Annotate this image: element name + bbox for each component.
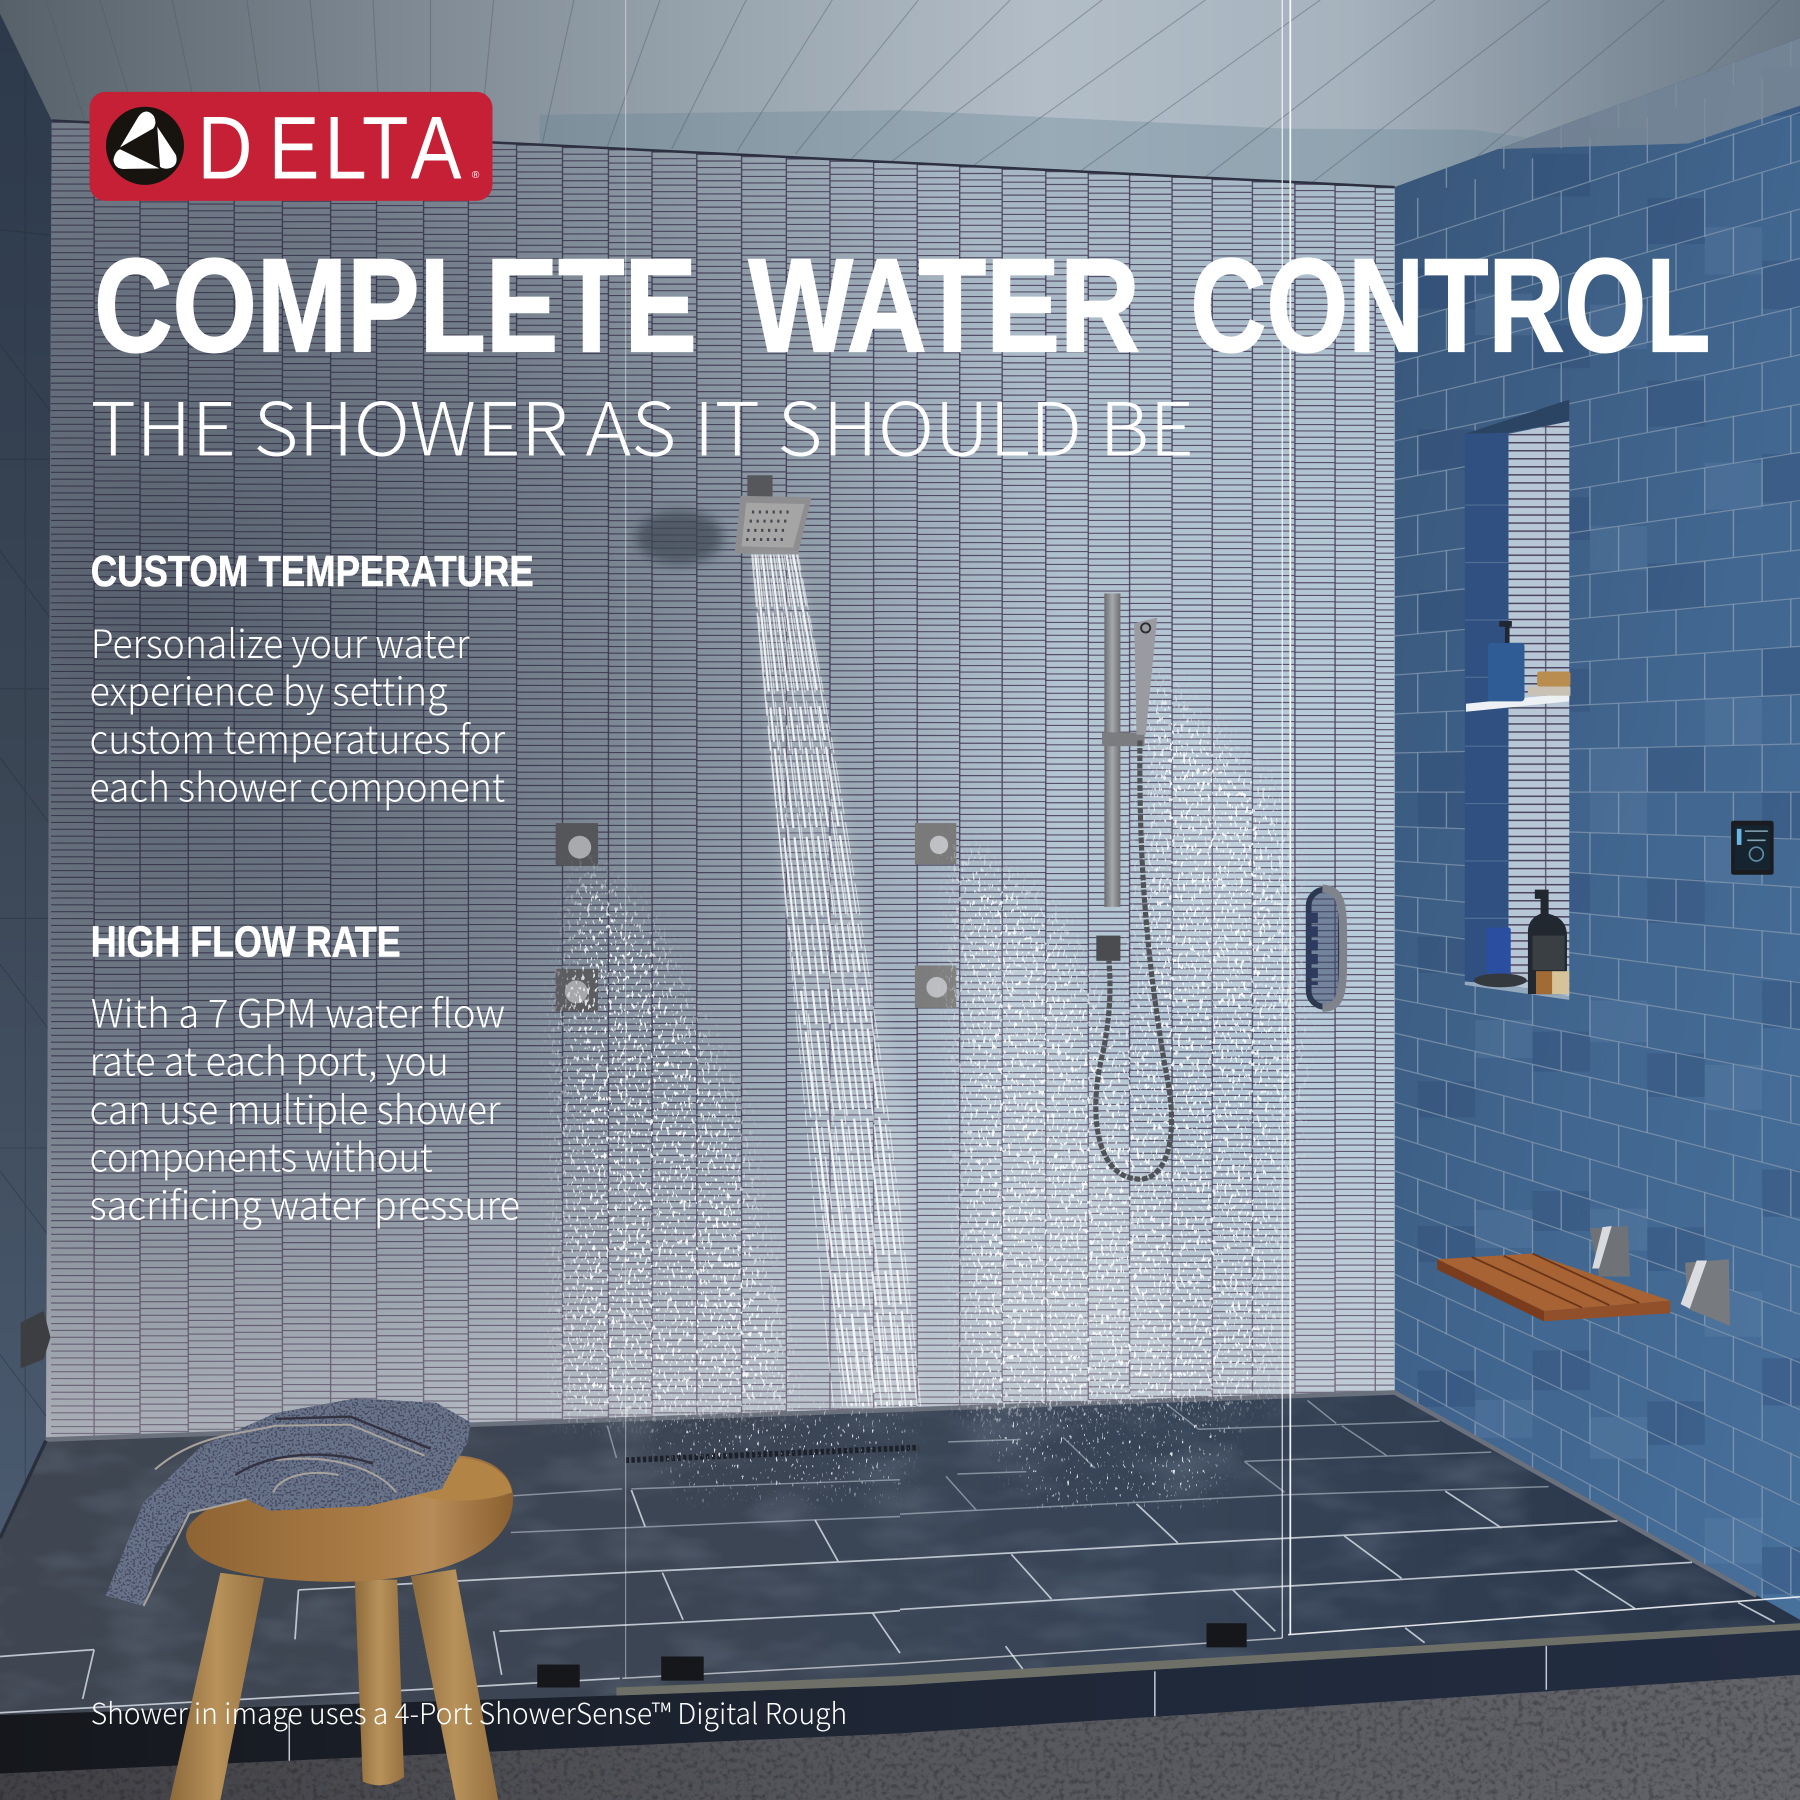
slide bar, hand shower and hose bbox=[1096, 593, 1172, 1179]
stone bathroom floor bbox=[0, 1675, 1800, 1800]
glass door handle bbox=[1309, 889, 1343, 1008]
body text: can use multiple shower bbox=[90, 1080, 501, 1136]
wall niche with shelf and bottles bbox=[1465, 399, 1570, 1000]
water spray droplets bbox=[562, 672, 1297, 1414]
blue pump bottle bbox=[1488, 621, 1524, 701]
body text bbox=[90, 614, 506, 813]
digital control panel bbox=[1731, 821, 1774, 875]
linear drain bbox=[626, 1448, 918, 1460]
ceiling bbox=[0, 0, 1800, 195]
right wall: blue brick bbox=[1395, 34, 1800, 1630]
dish bbox=[1474, 973, 1527, 987]
shower head bbox=[636, 475, 812, 565]
title bbox=[94, 231, 1710, 380]
glass door lines bbox=[622, 0, 1800, 1678]
body text: Personalize your water bbox=[91, 614, 470, 670]
logo mark bbox=[106, 107, 184, 185]
heading: HIGH FLOW RATE bbox=[91, 918, 401, 966]
blue jar bbox=[1487, 928, 1511, 977]
wall grab-bar bracket bbox=[21, 1311, 51, 1368]
body text: experience by setting bbox=[90, 661, 448, 717]
curb bbox=[0, 1623, 1800, 1774]
soap bbox=[1552, 971, 1569, 994]
body text: rate at each port, you bbox=[90, 1032, 449, 1088]
glass door clips bbox=[537, 1623, 1247, 1688]
title: WATER bbox=[748, 231, 1140, 380]
body text: custom temperatures for bbox=[90, 710, 506, 766]
registered mark: ® bbox=[472, 170, 480, 181]
wooden brush bbox=[1528, 672, 1570, 696]
body text: With a 7 GPM water flow bbox=[91, 983, 505, 1039]
wordmark: DELTA bbox=[197, 98, 462, 198]
shower floor slate tiles bbox=[0, 1391, 1800, 1715]
title: COMPLETE bbox=[94, 231, 697, 380]
wooden stool bbox=[170, 1456, 513, 1800]
main rain stream bbox=[752, 554, 921, 1406]
left side wall bbox=[0, 14, 52, 1538]
folded towel on stool bbox=[106, 1398, 471, 1606]
footnote: Shower in image uses a 4-Port ShowerSense™ Digital Rough bbox=[91, 1692, 847, 1733]
droplets on the floor bbox=[643, 1398, 1240, 1504]
feature: custom temperature bbox=[90, 548, 534, 813]
subtitle: THE SHOWER AS IT SHOULD BE bbox=[91, 372, 1194, 478]
back wall: stacked tile bbox=[46, 115, 1395, 1446]
floor tile joints bbox=[511, 1401, 1549, 1533]
body text: each shower component bbox=[90, 757, 505, 813]
body text bbox=[90, 983, 520, 1232]
spray mist glow bbox=[964, 689, 1274, 1389]
heading: CUSTOM TEMPERATURE bbox=[91, 548, 534, 596]
fold-down teak bench bbox=[1437, 1226, 1730, 1326]
Delta logo badge bbox=[90, 92, 492, 201]
body spray jets bbox=[556, 823, 956, 1011]
body text: sacrificing water pressure bbox=[90, 1176, 520, 1232]
feature: high flow rate bbox=[90, 918, 520, 1232]
front floor tile joints bbox=[0, 1490, 1775, 1713]
body text: components without bbox=[90, 1127, 433, 1183]
dark pump bottle bbox=[1528, 890, 1567, 994]
shelf bbox=[1466, 693, 1569, 712]
